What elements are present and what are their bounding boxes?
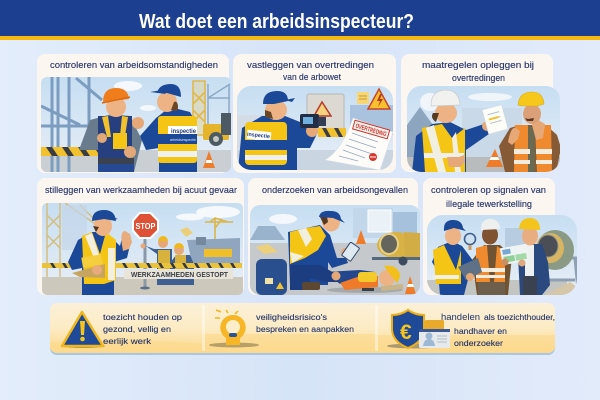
warning barrier	[41, 147, 98, 156]
inspector with vest	[140, 107, 197, 172]
illustration: inspector talks with worker: arbeidsinspectie	[170, 138, 196, 142]
electrical box	[307, 94, 344, 132]
header banner	[0, 0, 600, 40]
panel heading: illegale tewerkstelling	[446, 199, 532, 209]
worker with white helmet and orange vest	[472, 219, 512, 295]
panel: maatregelen opleggen	[401, 54, 561, 172]
panel: controleren van arbeidsomstandigheden	[37, 54, 231, 173]
icon: warning triangle	[61, 312, 105, 348]
identity documents	[500, 244, 529, 265]
panel heading: onderzoeken van arbeidsongevallen	[262, 185, 408, 195]
illustration: inspector talks with worker: inspectie	[171, 129, 197, 135]
industrial building	[187, 238, 240, 263]
injured worker lying down	[325, 266, 403, 293]
illustration: documenting a violation: inspectie	[247, 132, 270, 140]
traffic cones	[356, 230, 366, 244]
illustration: work stopped	[42, 203, 243, 295]
traffic cone	[203, 151, 215, 168]
yellow crane	[205, 218, 233, 240]
panel heading: vastleggen van overtredingen	[247, 60, 374, 70]
backpack	[256, 259, 287, 295]
text block: toezicht	[103, 312, 182, 346]
notice paper	[482, 105, 508, 134]
yellow notice	[357, 92, 369, 104]
title: Wat doet een arbeidsinspecteur?	[139, 11, 414, 33]
inspector kneeling with tablet	[288, 225, 348, 285]
worker with yellow helmet	[499, 125, 561, 172]
text block: handelen: onderzoeker	[454, 338, 503, 348]
traffic cone	[486, 149, 503, 167]
text block: handelen	[441, 312, 555, 348]
panel heading	[422, 60, 534, 83]
inspector raising hand	[68, 232, 130, 295]
illustration: inspector talks with worker	[40, 77, 231, 172]
text block: toezicht: toezicht houden op	[103, 312, 182, 322]
illustration: imposing measures	[407, 86, 561, 172]
text block: veiligheidsrisico's	[256, 312, 354, 334]
violation document: OVERTREDING	[355, 123, 387, 138]
panel heading: controleren van arbeidsomstandigheden	[50, 60, 218, 70]
panel heading: maatregelen opleggen bij	[422, 60, 534, 70]
text block: toezicht: gezond, vellig en	[103, 324, 171, 334]
panel heading	[431, 185, 546, 209]
panel: controleren op signalen van illegale tewerkstelling	[423, 178, 587, 295]
icon: euro shield and id card: €	[400, 321, 412, 344]
icon: euro shield and id card	[387, 310, 450, 348]
worker with orange helmet	[79, 114, 142, 172]
panel heading: stilleggen van werkzaamheden bij acuut gevaar	[45, 185, 237, 195]
concrete mixer	[549, 256, 577, 284]
text block: handelen: als toezichthouder,	[484, 312, 555, 322]
stopped work sign: WERKZAAMHEDEN GESTOPT	[131, 270, 228, 279]
text block: veiligheidsrisico's: veiligheidsrisico's	[256, 312, 327, 322]
panel heading: overtredingen	[452, 73, 505, 83]
illustration: three people check documents	[427, 215, 587, 295]
panel heading: controleren op signalen van	[431, 185, 546, 195]
camera	[300, 114, 319, 128]
panel: onderzoeken van arbeidsongevallen	[248, 178, 420, 295]
inspector with camera	[238, 116, 318, 170]
bottom strip	[50, 303, 555, 355]
concrete mixer	[377, 232, 405, 257]
illustration: accident investigation	[250, 205, 420, 295]
warning sign	[368, 89, 390, 109]
stop sign: STOP	[136, 221, 156, 231]
text block: handelen: handelen	[441, 312, 480, 323]
illustration: documenting a violation	[237, 86, 393, 170]
barrier tape	[42, 263, 242, 268]
panel heading	[247, 60, 374, 82]
text block: handelen: handhaver en	[454, 326, 507, 336]
panel heading: van de arbowet	[283, 72, 342, 82]
inspector with white helmet	[412, 122, 489, 172]
inspector with magnifier	[432, 220, 482, 295]
icon: light bulb	[209, 310, 259, 348]
two stopped workers	[140, 236, 194, 285]
stop sign	[132, 212, 159, 290]
panel: stilleggen van werkzaamheden	[37, 178, 244, 295]
text block: veiligheidsrisico's: bespreken en aanpakken	[256, 324, 354, 334]
worker with yellow helmet and navy jacket	[518, 218, 550, 295]
text block: toezicht: eerlijk werk	[103, 336, 152, 346]
panel: vastleggen van overtredingen	[233, 54, 396, 173]
violation document	[325, 118, 393, 170]
